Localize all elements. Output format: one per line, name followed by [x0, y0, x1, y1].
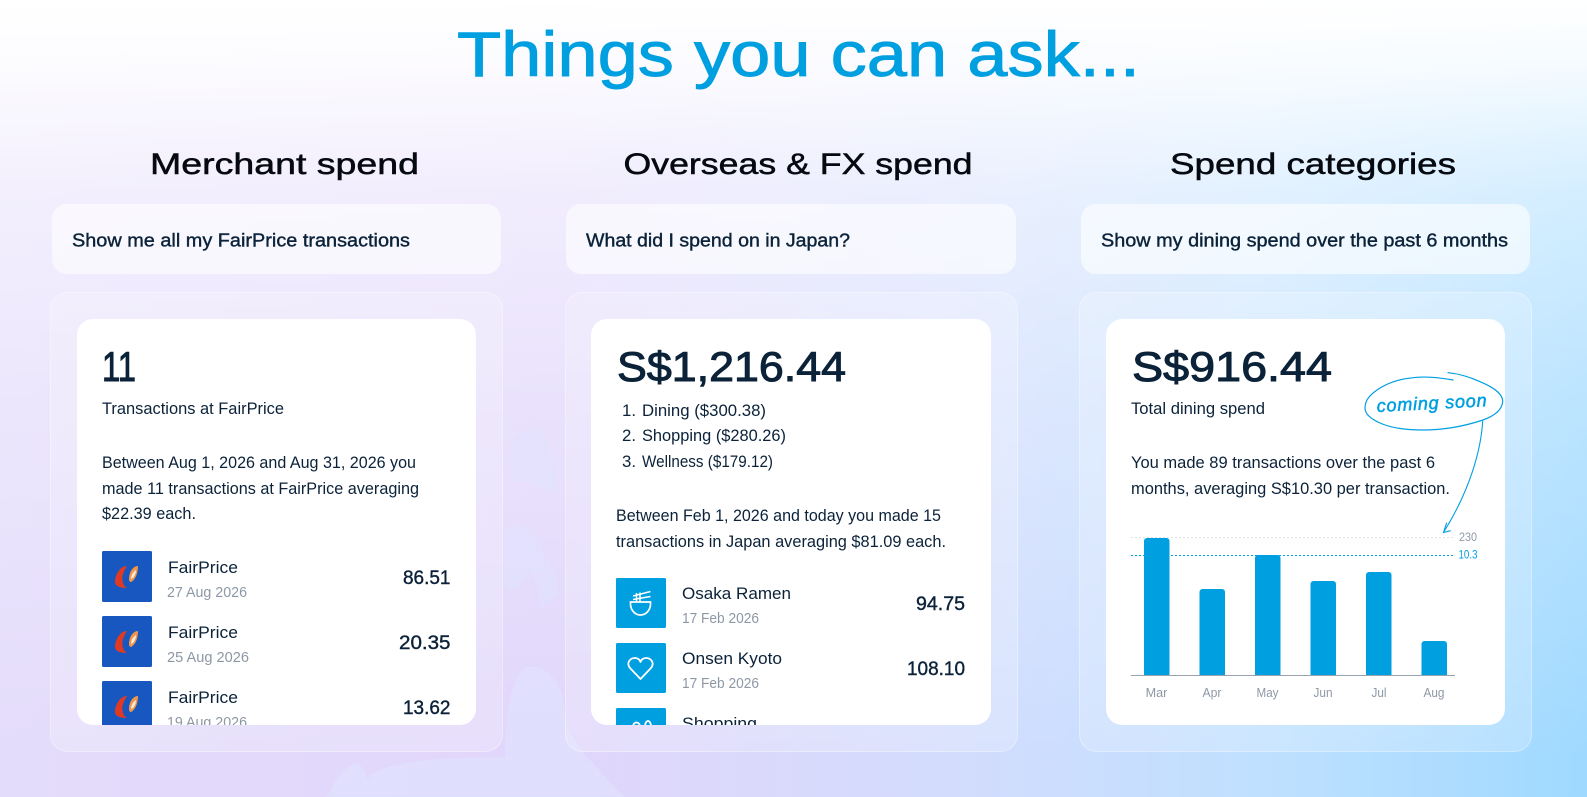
bar chart: monthly dining spend: May — [1256, 686, 1279, 700]
transaction row 3: 19 Aug 2026 — [167, 715, 247, 731]
big number: total overseas spend: S$1,216.44 — [617, 343, 846, 390]
icon: ramen bowl — [616, 578, 666, 628]
question box: merchant: Show me all my FairPrice transactions — [72, 230, 410, 250]
summary paragraph — [102, 454, 419, 523]
callout: coming soon: coming soon — [1376, 390, 1487, 416]
summary paragraph — [616, 507, 946, 551]
summary paragraph: months, averaging S$10.30 per transaction. — [1131, 480, 1450, 498]
result card: merchant — [77, 319, 476, 732]
transaction row 3: FairPrice — [168, 689, 238, 707]
bar chart: monthly dining spend: Apr — [1202, 686, 1222, 700]
result card: overseas — [591, 319, 991, 758]
transaction row 1 — [102, 551, 450, 602]
transaction row: Onsen Kyoto — [616, 643, 965, 693]
summary paragraph: Between Feb 1, 2026 and today you made 15 — [616, 507, 941, 525]
callout: coming soon — [1365, 373, 1503, 532]
icon: heart — [616, 643, 666, 693]
summary paragraph: You made 89 transactions over the past 6 — [1131, 454, 1435, 472]
bar chart: monthly dining spend — [1131, 532, 1478, 700]
summary paragraph: Between Aug 1, 2026 and Aug 31, 2026 you — [102, 454, 416, 472]
transaction row: Shopping — [616, 708, 756, 725]
bar chart: monthly dining spend: Aug — [1424, 686, 1445, 700]
transaction row: Shopping: Shopping — [682, 715, 757, 733]
glass panel: categories — [1080, 292, 1532, 752]
transaction row: Onsen Kyoto: 17 Feb 2026 — [682, 676, 759, 692]
bar chart: monthly dining spend: Jun — [1314, 686, 1333, 700]
summary paragraph: $22.39 each. — [102, 505, 196, 523]
bar chart: monthly dining spend: 230 — [1459, 532, 1477, 544]
ranked category list: Shopping ($280.26) — [642, 427, 786, 445]
ranked category list: Wellness ($179.12) — [642, 453, 773, 471]
summary paragraph — [1131, 454, 1450, 498]
heading: merchant spend: Merchant spend — [150, 148, 419, 181]
heading: overseas and FX spend: Overseas & FX spend — [624, 148, 972, 181]
transaction row 3: 13.62 — [403, 697, 450, 719]
question box: Japan: What did I spend on in Japan? — [586, 230, 850, 250]
glass panel: merchant — [50, 292, 502, 752]
transaction row 1: 27 Aug 2026 — [167, 585, 247, 601]
column: overseas and FX spend — [566, 148, 1018, 758]
question box: dining — [1081, 204, 1530, 274]
transaction list: FairPrice — [102, 551, 451, 732]
column: merchant spend — [50, 148, 502, 752]
transaction row 2: 20.35 — [399, 632, 451, 654]
glass panel: overseas — [566, 292, 1018, 752]
ranked category list: 3. — [622, 453, 636, 471]
transaction list: Japan — [616, 578, 964, 725]
title: Things you can ask... — [457, 20, 1140, 90]
transaction row: Onsen Kyoto: Onsen Kyoto — [682, 650, 782, 668]
bar chart: monthly dining spend: 10.3 — [1458, 550, 1478, 562]
column: spend categories — [1080, 148, 1532, 752]
heading: spend categories: Spend categories — [1170, 148, 1456, 181]
ranked category list: 2. — [622, 427, 636, 445]
transaction row 2: FairPrice — [168, 624, 238, 642]
label: transactions at FairPrice: Transactions at FairPrice — [102, 400, 284, 418]
transaction row: Osaka Ramen: 94.75 — [916, 593, 965, 615]
big number: total dining spend: S$916.44 — [1132, 343, 1332, 390]
big number: 11: 11 — [102, 343, 136, 390]
question box: merchant — [52, 204, 501, 274]
transaction row: Osaka Ramen: 17 Feb 2026 — [682, 611, 759, 627]
transaction row: Osaka Ramen — [616, 578, 965, 628]
transaction row: Onsen Kyoto: 108.10 — [907, 658, 965, 680]
transaction row: Osaka Ramen: Osaka Ramen — [682, 585, 791, 603]
transaction row 1: FairPrice — [168, 559, 238, 577]
label: total dining spend: Total dining spend — [1131, 400, 1265, 418]
transaction row 1: 86.51 — [403, 567, 450, 589]
transaction row 3 — [102, 681, 450, 725]
summary paragraph: transactions in Japan averaging $81.09 each. — [616, 533, 946, 551]
bar chart: monthly dining spend: Jul — [1372, 686, 1386, 700]
transaction row 2: 25 Aug 2026 — [167, 650, 249, 666]
ranked category list — [622, 402, 786, 471]
ranked category list: Dining ($300.38) — [642, 402, 766, 420]
summary paragraph: made 11 transactions at FairPrice averaging — [102, 480, 419, 498]
bar chart: monthly dining spend: Mar — [1146, 686, 1167, 700]
result card: categories — [1106, 319, 1505, 725]
question box: dining: Show my dining spend over the past 6 months — [1101, 230, 1508, 250]
ranked category list: 1. — [622, 402, 636, 420]
question box: Japan — [566, 204, 1016, 274]
icon: shopping — [616, 708, 666, 725]
transaction row 2 — [102, 616, 451, 667]
